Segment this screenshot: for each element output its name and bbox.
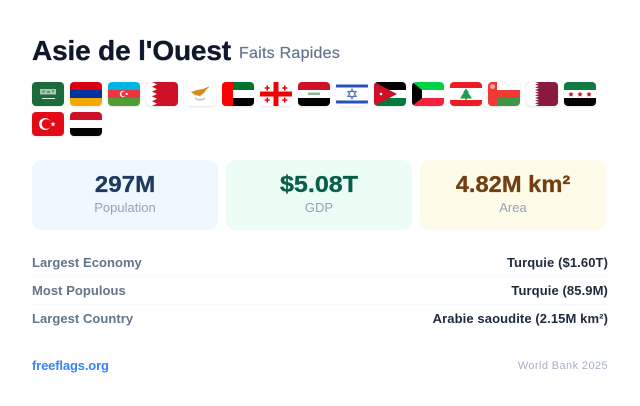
GDP value: $5.08T bbox=[280, 171, 358, 197]
flag: Kuwait bbox=[412, 82, 444, 106]
flag: Oman bbox=[488, 82, 520, 106]
row label: largest country: Largest Country bbox=[32, 311, 133, 326]
population value: 297M bbox=[95, 171, 155, 197]
flag: Jordan bbox=[374, 82, 406, 106]
flag: Cyprus bbox=[184, 82, 216, 106]
GDP label: GDP bbox=[305, 200, 333, 215]
flag: Qatar bbox=[526, 82, 558, 106]
flag: Bahrain bbox=[146, 82, 178, 106]
stat card: GDP bbox=[226, 160, 412, 230]
area label: Area bbox=[499, 200, 527, 215]
row label: most populous: Most Populous bbox=[32, 283, 126, 298]
flag: Turkey bbox=[32, 112, 64, 136]
flag: Azerbaijan bbox=[108, 82, 140, 106]
flag: Syria bbox=[564, 82, 596, 106]
row value: largest economy: Turquie ($1.60T) bbox=[507, 255, 608, 270]
flag grid bbox=[32, 82, 596, 138]
footer link: freeflags.org bbox=[32, 358, 109, 373]
stat card: population bbox=[32, 160, 218, 230]
flag: Georgia bbox=[260, 82, 292, 106]
flag: Armenia bbox=[70, 82, 102, 106]
flag: United Arab Emirates bbox=[222, 82, 254, 106]
row value: largest country: Arabie saoudite (2.15M km²) bbox=[433, 311, 608, 326]
title: Asie de l'Ouest bbox=[32, 35, 231, 66]
area value: 4.82M km² bbox=[456, 171, 570, 197]
row label: largest economy: Largest Economy bbox=[32, 255, 142, 270]
stat card: area bbox=[420, 160, 606, 230]
flag: Saudi Arabia bbox=[32, 82, 64, 106]
flag: Yemen bbox=[70, 112, 102, 136]
population label: Population bbox=[94, 200, 156, 215]
flag: Israel bbox=[336, 82, 368, 106]
flag: Lebanon bbox=[450, 82, 482, 106]
subtitle: Faits Rapides bbox=[239, 45, 340, 62]
flag: Iraq bbox=[298, 82, 330, 106]
footer source: World Bank 2025 bbox=[518, 360, 608, 372]
row value: most populous: Turquie (85.9M) bbox=[511, 283, 608, 298]
